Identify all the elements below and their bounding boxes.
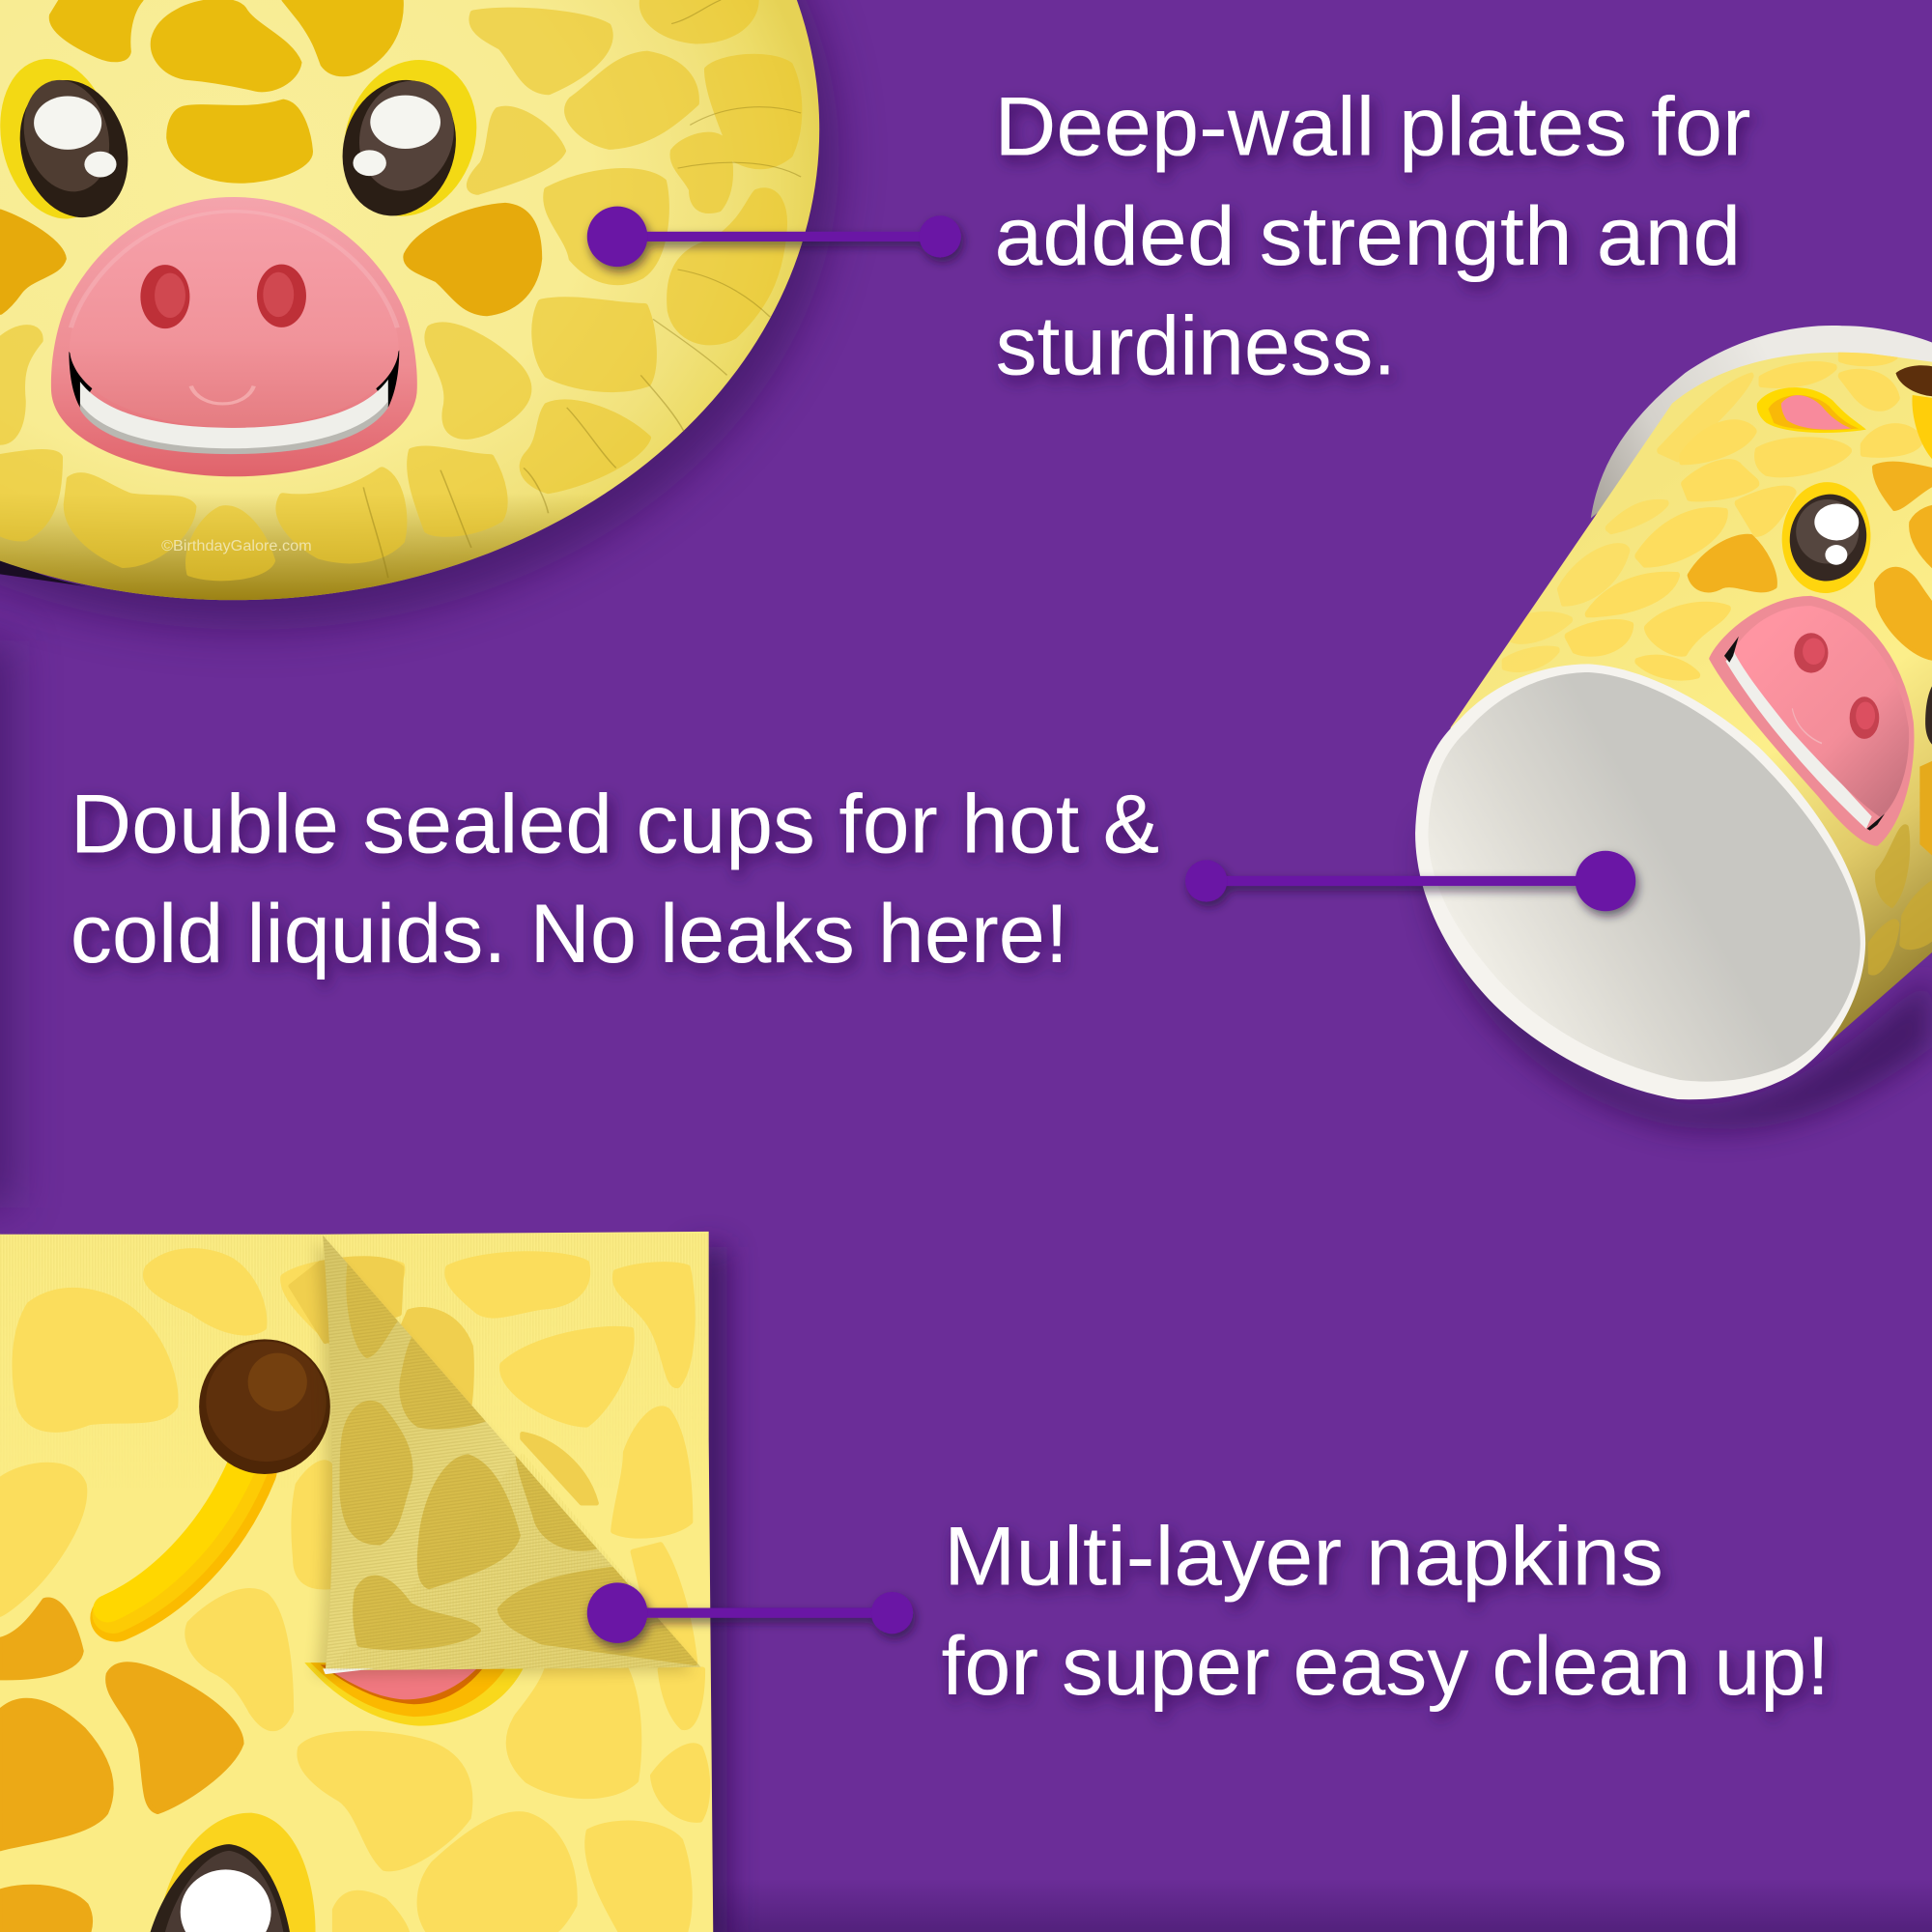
text: napkins: for super easy clean up! <box>941 1619 1830 1713</box>
napkin <box>0 1232 727 1932</box>
text: napkins <box>941 1509 1830 1713</box>
cup snout <box>1710 598 1913 844</box>
text: plates: Deep-wall plates for <box>994 80 1750 174</box>
text: cups: Double sealed cups for hot & <box>71 778 1159 871</box>
text: napkins: Multi-layer napkins <box>944 1509 1663 1603</box>
text: plates <box>994 80 1750 393</box>
paper plate <box>0 0 839 630</box>
plate snout <box>51 197 417 476</box>
plate nostrils <box>140 265 306 328</box>
plate mouth corners <box>69 351 399 408</box>
napkin mouth <box>304 1662 525 1726</box>
cup body <box>1450 353 1932 1050</box>
cup eye <box>1779 478 1932 745</box>
plate orange spots <box>0 205 539 314</box>
plate right eye <box>332 54 489 221</box>
text: cups <box>71 778 1159 980</box>
cup lower spots <box>1870 827 1932 973</box>
fold spots <box>343 1259 695 1662</box>
plate giraffe face <box>0 0 801 578</box>
cup back rim <box>1591 326 1932 518</box>
plate teeth <box>80 380 388 454</box>
plate rim creases <box>363 0 801 578</box>
plate dark spots <box>52 0 401 182</box>
text: plates: sturdiness. <box>996 299 1396 393</box>
cup orange spots <box>1689 464 1932 659</box>
cup <box>1415 326 1932 1130</box>
napkin sheet <box>0 1232 713 1932</box>
napkin light spots <box>0 1251 707 1932</box>
callout marker: plate <box>587 207 961 267</box>
plate light spots <box>0 0 798 578</box>
cup light spots <box>1504 354 1921 677</box>
napkin horn <box>108 1339 330 1618</box>
plate left eye <box>0 55 138 223</box>
text: plates: added strength and <box>994 189 1741 283</box>
plate copyright: ©BirthdayGalore.com <box>161 538 312 554</box>
cup bottom inner <box>1428 672 1861 1082</box>
napkin spots beside fold <box>291 1259 596 1503</box>
text: cups: cold liquids. No leaks here! <box>71 887 1068 980</box>
cup ear <box>1757 387 1866 433</box>
napkin orange spots <box>0 1600 242 1932</box>
napkin eye <box>151 1813 316 1932</box>
callout marker: cup <box>1185 851 1635 911</box>
cup horn <box>1895 365 1932 459</box>
cup mouth corners <box>1724 637 1885 831</box>
cup bottom rim <box>1415 664 1865 1099</box>
napkin fold <box>316 1236 701 1676</box>
callout marker: napkin <box>587 1582 913 1643</box>
